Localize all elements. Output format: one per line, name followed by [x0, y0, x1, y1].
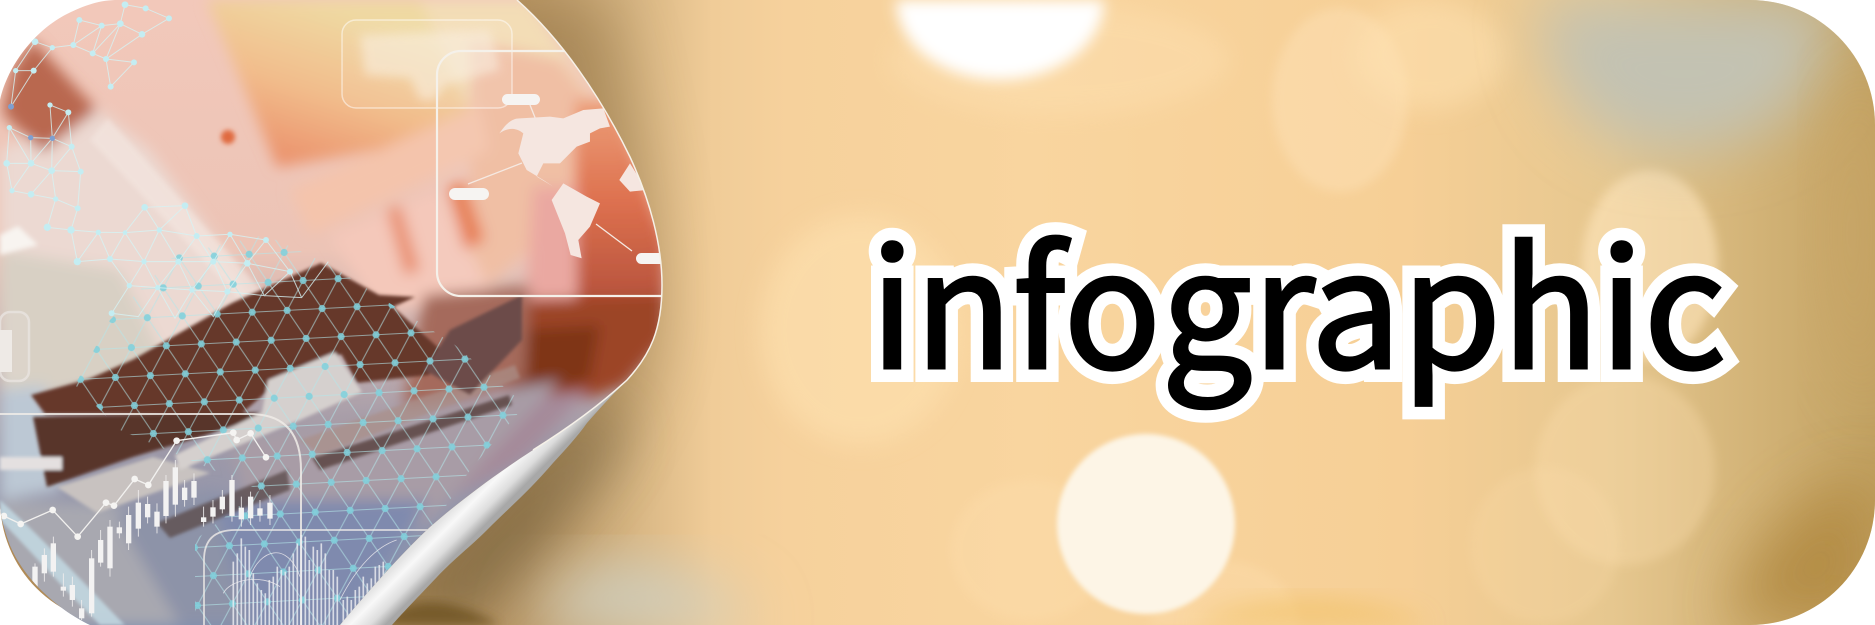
bokeh: top white light [896, 0, 1104, 80]
sleeve, hand and desk [0, 263, 522, 625]
icon: world map [499, 108, 647, 258]
candlestick and line chart [1, 429, 273, 620]
photo: laptop user under digital network overlay [0, 0, 717, 625]
title: infographic [870, 179, 1726, 415]
shadow cast by the page curl [392, 0, 743, 625]
spot on the wall [221, 130, 235, 144]
network mesh: upper left lattice [3, 1, 328, 318]
photo rim highlight [517, 0, 662, 450]
title: infographic [870, 179, 1726, 415]
blurred office scene [0, 0, 665, 625]
histogram and curves in lower card [223, 535, 397, 625]
colour washes [1190, 0, 1875, 625]
glass panel: world map card [436, 50, 661, 298]
bokeh: soft lights [760, 1, 1718, 625]
network mesh: lower lattice [75, 235, 525, 625]
icon: small glass card left edge [0, 312, 29, 381]
white paper fragment left edge [0, 226, 38, 255]
glass panel: chart card outlines [0, 414, 450, 625]
bokeh: bottom white light [1057, 434, 1235, 614]
shirt collar highlight [95, 121, 260, 296]
glass panel: faded map card [342, 20, 512, 108]
page curl flap [340, 380, 627, 625]
